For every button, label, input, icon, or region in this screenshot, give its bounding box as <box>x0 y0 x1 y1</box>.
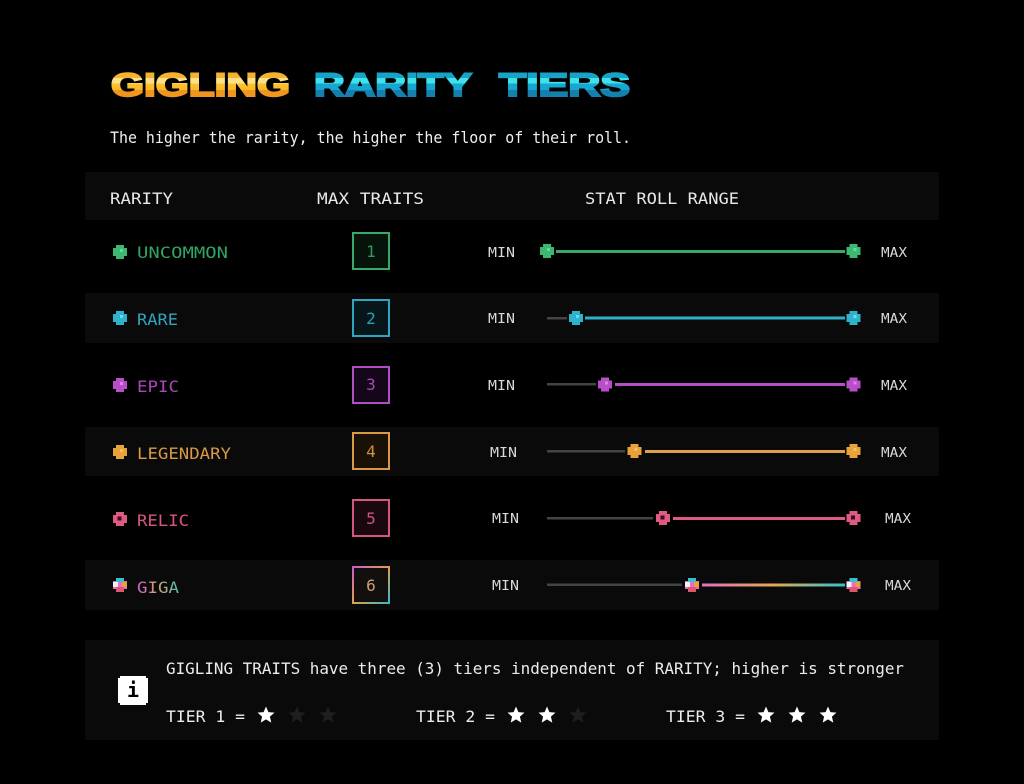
legendary badge: 4 <box>366 442 376 461</box>
note text: GIGLING TRAITS have three (3) tiers independent of RARITY; higher is stronger <box>166 659 904 678</box>
title: GIGLING <box>111 67 290 103</box>
legendary label: LEGENDARY <box>137 444 231 463</box>
title <box>111 67 630 103</box>
tier 2 <box>416 706 586 726</box>
epic dot <box>113 378 127 392</box>
legendary range: MIN <box>490 446 517 461</box>
column heading: stat roll range: STAT ROLL RANGE <box>585 189 739 208</box>
rare label: RARE <box>137 310 178 329</box>
giga badge: 6 <box>366 576 376 595</box>
giga range <box>492 578 911 594</box>
giga badge <box>353 567 389 603</box>
tier 3 <box>666 706 836 726</box>
rare badge <box>353 300 389 336</box>
relic range <box>492 511 911 527</box>
column heading: rarity: RARITY <box>110 189 173 208</box>
icon: info <box>118 676 148 705</box>
subtitle: The higher the rarity, the higher the floor of their roll. <box>110 128 631 147</box>
rare dot <box>113 311 127 325</box>
legendary range: MAX <box>881 446 907 461</box>
title: RARITY <box>314 67 472 103</box>
legendary range <box>490 444 907 461</box>
epic range <box>488 378 907 394</box>
legendary dot <box>113 445 127 459</box>
column heading: max traits: MAX TRAITS <box>317 189 424 208</box>
uncommon range: MAX <box>881 246 907 261</box>
uncommon badge <box>353 233 389 269</box>
tier 2: TIER 2 = <box>416 707 495 726</box>
giga range: MAX <box>885 579 911 594</box>
uncommon label: UNCOMMON <box>137 243 228 262</box>
tier 3: TIER 3 = <box>666 707 745 726</box>
row: rare <box>85 293 939 343</box>
uncommon dot <box>113 245 127 259</box>
legendary badge <box>353 433 389 469</box>
row: giga <box>85 560 939 610</box>
row: relic <box>113 500 911 536</box>
giga label: GIGA <box>137 578 179 597</box>
rare range: MAX <box>881 312 907 327</box>
uncommon badge: 1 <box>366 242 376 261</box>
relic range: MIN <box>492 512 519 527</box>
epic badge <box>353 367 389 403</box>
rare range <box>488 311 907 327</box>
epic badge: 3 <box>366 375 376 394</box>
uncommon range: MIN <box>488 246 515 261</box>
giga dot <box>113 578 127 592</box>
giga range: MIN <box>492 579 519 594</box>
epic range: MAX <box>881 379 907 394</box>
epic range: MIN <box>488 379 515 394</box>
table header <box>85 172 939 220</box>
panel: trait tiers note <box>85 640 939 740</box>
relic badge <box>353 500 389 536</box>
icon: info: i <box>127 678 139 702</box>
relic range: MAX <box>885 512 911 527</box>
relic badge: 5 <box>366 509 376 528</box>
rare badge: 2 <box>366 309 376 328</box>
row: epic <box>113 367 907 403</box>
epic label: EPIC <box>137 377 179 396</box>
row: legendary <box>85 427 939 476</box>
uncommon range <box>488 244 907 261</box>
title: TIERS <box>499 67 630 103</box>
tier 1 <box>166 706 336 726</box>
tier 1: TIER 1 = <box>166 707 245 726</box>
relic label: RELIC <box>137 511 189 530</box>
relic dot <box>113 512 127 526</box>
rare range: MIN <box>488 312 515 327</box>
row: uncommon <box>113 233 907 269</box>
